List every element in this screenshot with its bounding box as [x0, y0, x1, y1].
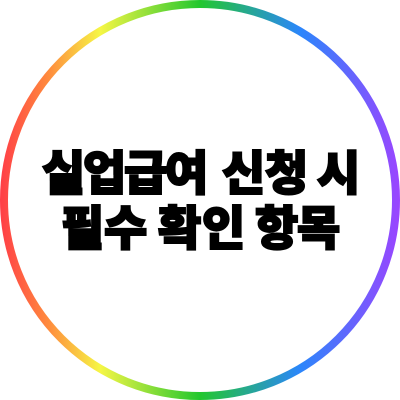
title — [42, 147, 360, 255]
title line 1: 실업급여 신청 시 — [42, 147, 360, 200]
title line 2: 필수 확인 항목 — [61, 202, 340, 255]
